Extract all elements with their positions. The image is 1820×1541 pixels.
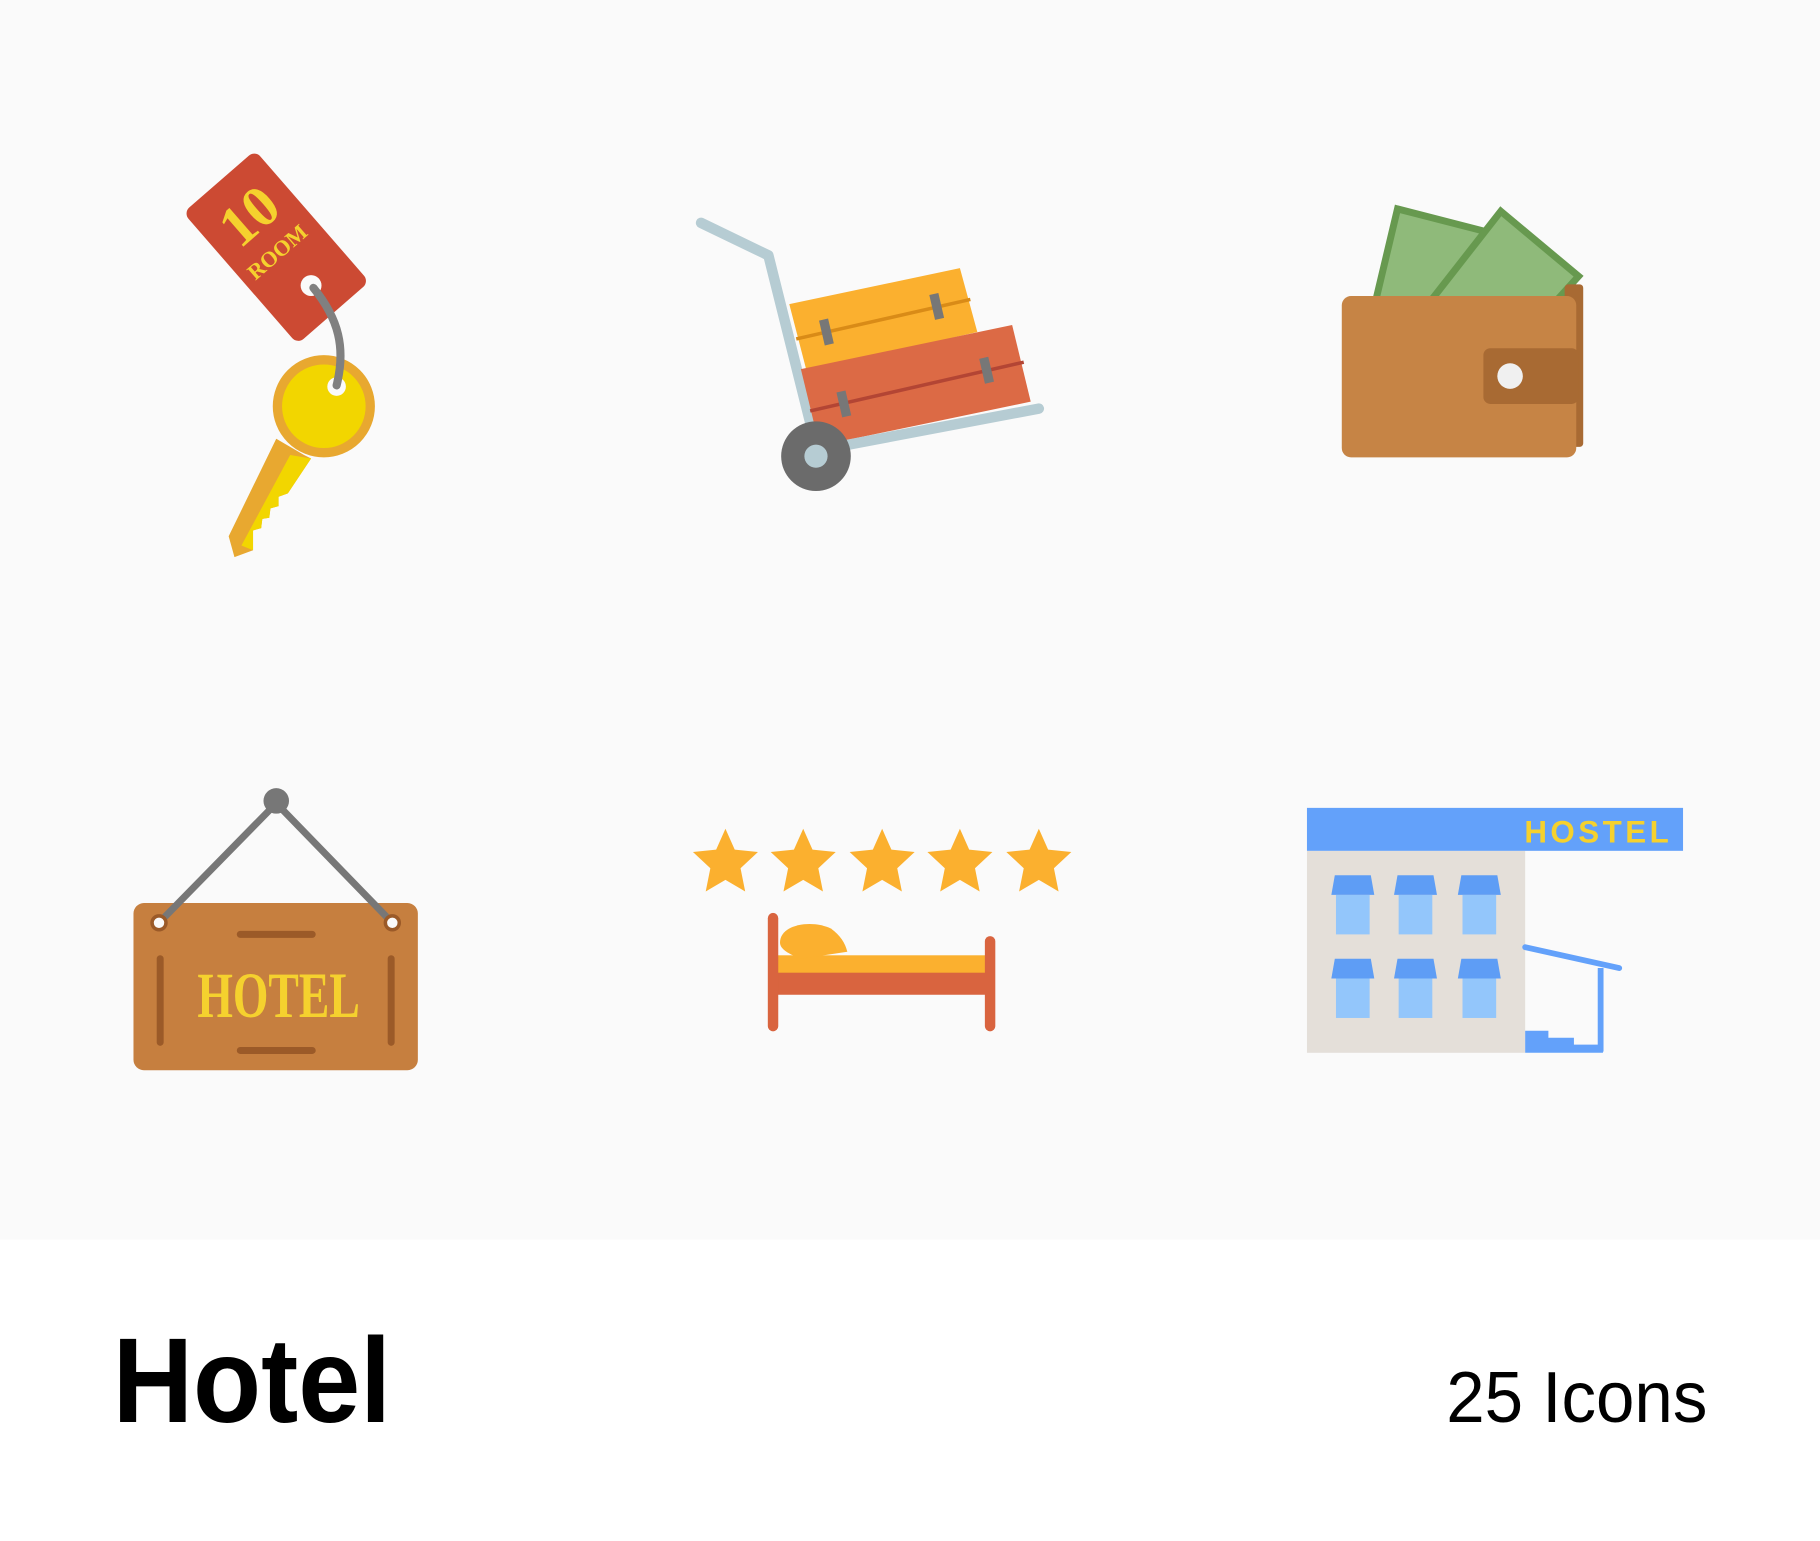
icon: five star bed <box>693 829 1071 1026</box>
title: Hotel: Hotel <box>113 1313 391 1448</box>
icon: luggage trolley <box>701 223 1039 491</box>
text: 25 Icons: 25 Icons <box>1446 1358 1707 1438</box>
icon: hanging hotel sign: HOTEL <box>197 960 360 1032</box>
wheel <box>781 421 851 491</box>
icon: hostel building <box>1307 808 1683 1053</box>
key tag: ROOM <box>242 219 312 285</box>
icon: hostel building: HOSTEL <box>1524 815 1672 850</box>
key shaft <box>229 439 311 557</box>
icon: room key with tag <box>183 150 370 557</box>
icon: hanging hotel sign <box>133 788 418 1070</box>
icon: wallet with money <box>1342 209 1583 457</box>
red suitcase <box>801 325 1031 446</box>
key ring <box>277 360 370 453</box>
key tag: 10 <box>206 172 292 259</box>
key tag <box>183 150 369 344</box>
yellow suitcase <box>789 268 977 371</box>
